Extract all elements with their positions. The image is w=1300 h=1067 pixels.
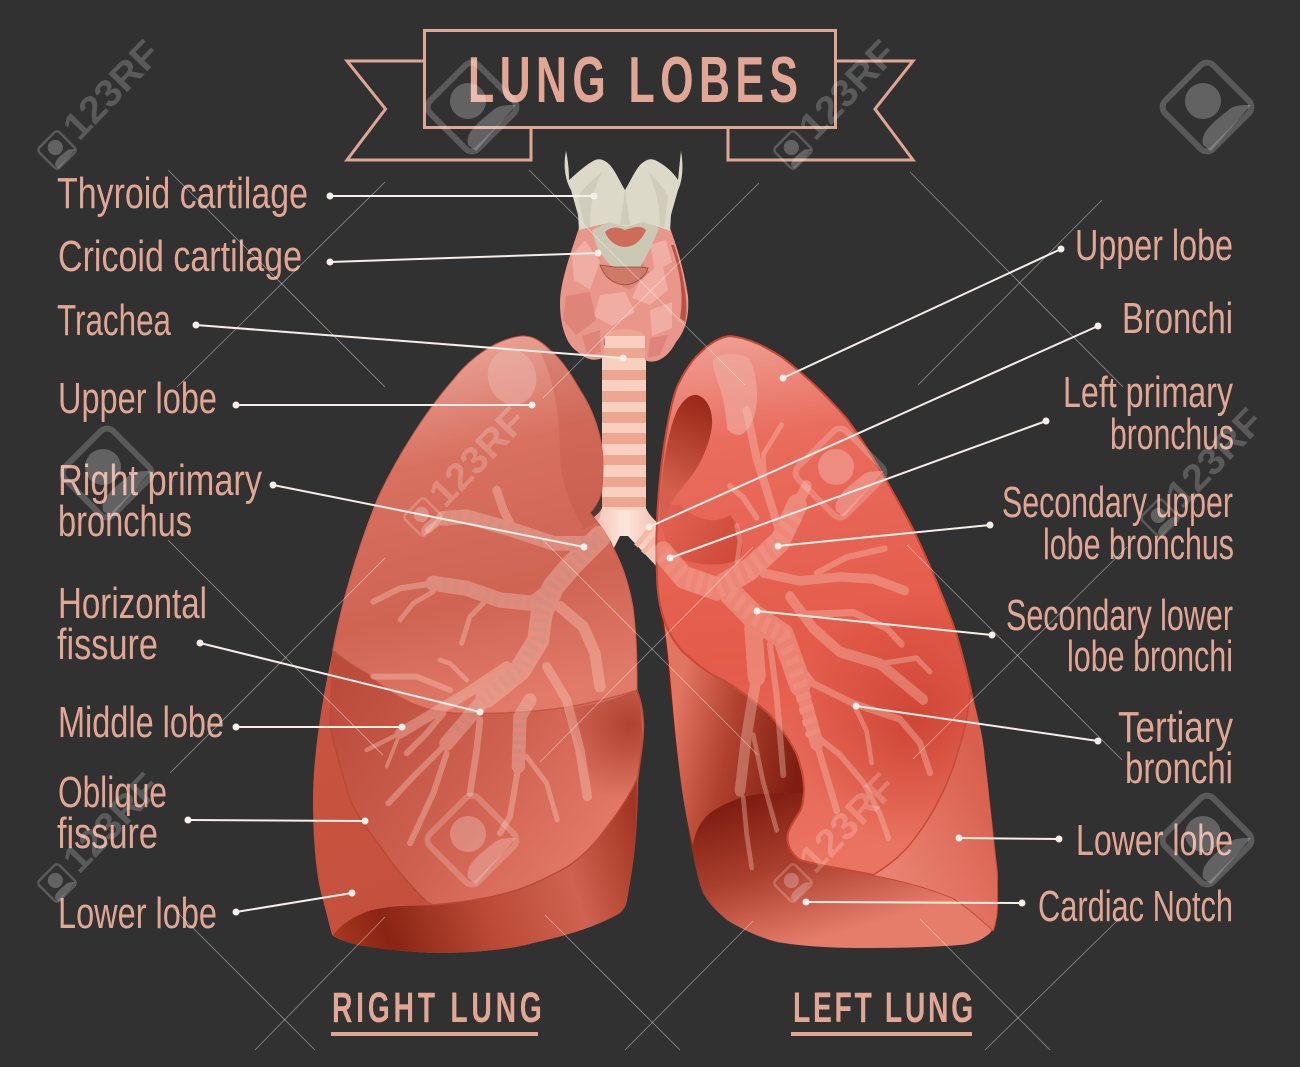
label: Lower lobe (left lung): Lower lobe — [1076, 816, 1233, 865]
watermark: small stamps with wordmark: 123RF — [55, 766, 169, 881]
callout: thyroid cartilage — [326, 192, 598, 200]
label: Lower lobe (right lung): Lower lobe — [58, 889, 217, 938]
watermark: small stamps with wordmark: 123RF — [55, 33, 169, 148]
label: Thyroid cartilage: Thyroid cartilage — [57, 169, 308, 218]
title: LUNG LOBES — [468, 43, 798, 116]
callout: bronchi — [646, 322, 1102, 530]
lung outline: lower lobe — [313, 336, 643, 953]
callout: upper lobe right — [232, 402, 536, 408]
label: Trachea: Trachea — [57, 296, 171, 345]
callout: right primary bronchus — [270, 482, 588, 550]
watermark: small stamps with wordmark: 123RF — [791, 33, 905, 148]
trachea — [588, 327, 658, 568]
label: Right primary bronchus: bronchus — [58, 497, 192, 546]
label: Upper lobe (left lung): Upper lobe — [1075, 221, 1233, 270]
label: Left primary bronchus — [1063, 368, 1234, 459]
cardiac impression lower — [660, 505, 742, 565]
apex highlight — [482, 344, 542, 410]
watermark: large stamps — [59, 59, 1255, 888]
callout: left primary bronchus — [666, 418, 1050, 562]
label: Tertiary bronchi: bronchi — [1125, 744, 1233, 793]
label: Tertiary bronchi: Tertiary — [1118, 703, 1233, 752]
label: Oblique fissure: Oblique — [58, 768, 167, 817]
label: Right primary bronchus: Right primary — [58, 456, 262, 505]
callout: tertiary bronchi — [852, 702, 1102, 744]
watermark: small stamps with wordmark — [37, 33, 1272, 903]
left bronchial tree — [663, 411, 930, 867]
callout: middle lobe — [232, 724, 406, 730]
label: Bronchi: Bronchi — [1122, 294, 1233, 343]
upper dark oval — [660, 395, 712, 530]
label: Secondary upper lobe bronchus — [1002, 478, 1234, 569]
label: Left primary bronchus: bronchus — [1110, 410, 1234, 459]
inner wall — [660, 600, 805, 846]
watermark: small stamps with wordmark: 123RF — [421, 400, 535, 515]
callout lines — [184, 192, 1102, 916]
label: Cricoid cartilage: Cricoid cartilage — [58, 232, 302, 281]
callout: oblique fissure — [184, 816, 368, 824]
thyroid gland — [560, 210, 688, 362]
callout: secondary lower lobe bronchi — [754, 608, 996, 638]
bottom of left lung — [656, 336, 997, 948]
watermark: small stamps with wordmark: 123RF — [1158, 401, 1272, 516]
label: Middle lobe: Middle lobe — [58, 698, 224, 747]
right lung — [313, 336, 643, 953]
callout: cardiac notch — [802, 898, 1026, 906]
callout: lower lobe right — [232, 890, 356, 916]
label: Tertiary bronchi — [1118, 703, 1233, 793]
label: Oblique fissure — [57, 768, 167, 858]
apex shadow — [540, 350, 602, 529]
apex highlight — [713, 354, 757, 435]
watermark: small stamps with wordmark: 123RF — [791, 766, 905, 881]
label: Upper lobe (right lung): Upper lobe — [58, 374, 217, 423]
callout: cricoid cartilage — [326, 250, 602, 266]
callout: upper lobe left — [780, 246, 1064, 382]
label: Horizontal fissure: fissure — [57, 620, 158, 669]
label: Oblique fissure: fissure — [57, 809, 158, 858]
callout: lower lobe left — [956, 834, 1062, 842]
thyroid cartilage — [565, 151, 682, 231]
upper lobe — [333, 336, 637, 713]
title banner — [347, 30, 913, 160]
label: Horizontal fissure: Horizontal — [58, 579, 207, 628]
middle lobe — [330, 650, 643, 905]
heading: right lung: RIGHT LUNG — [332, 983, 542, 1031]
cricoid cartilage — [592, 222, 659, 285]
callout: trachea — [192, 322, 626, 362]
lower lobe strip — [873, 692, 997, 930]
label: Secondary lower lobe bronchi — [1006, 591, 1233, 681]
heading: left lung: LEFT LUNG — [793, 983, 973, 1031]
label: Left primary bronchus: Left primary — [1063, 368, 1233, 417]
left lung — [656, 336, 997, 948]
callout: horizontal fissure — [196, 640, 484, 716]
dark shading — [660, 336, 997, 930]
callout: secondary upper lobe bronchus — [774, 522, 994, 550]
label: Horizontal fissure — [57, 579, 207, 669]
right bronchial tree — [367, 490, 600, 843]
bottom fold — [333, 777, 637, 953]
label: Right primary bronchus — [58, 456, 262, 546]
label: Secondary lower lobe bronchi: lobe bronchi — [1067, 632, 1233, 681]
front lobe — [656, 336, 997, 930]
